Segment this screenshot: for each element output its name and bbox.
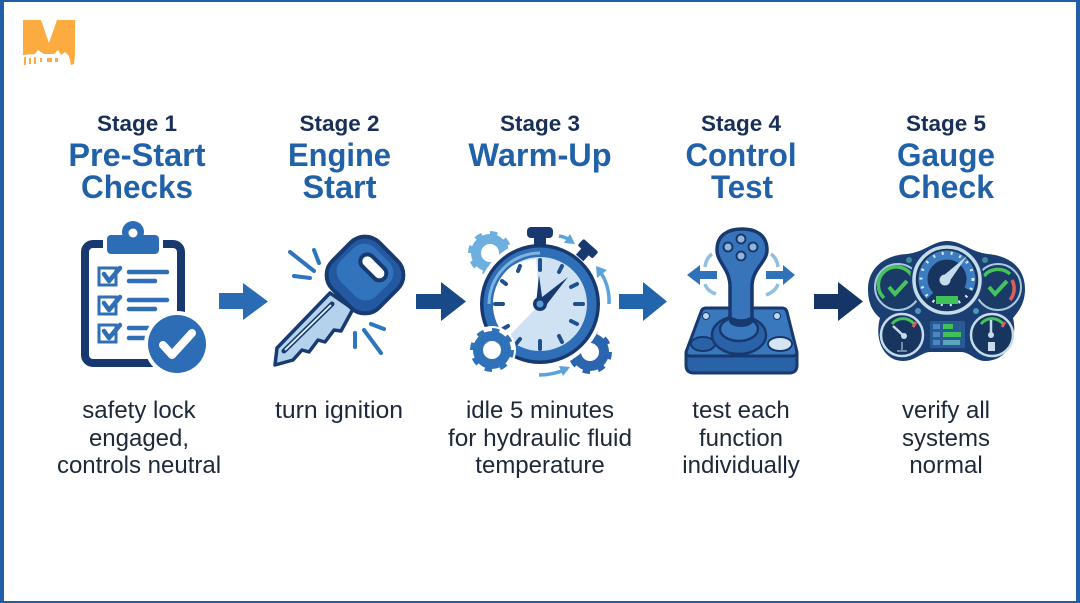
stage 1 description (57, 397, 221, 479)
stage 3 heading: Warm-Up (468, 137, 612, 173)
icon: stopwatch (468, 227, 609, 376)
stage 2 heading (288, 111, 391, 205)
gear: lower left (473, 331, 511, 369)
stage 1 heading: Checks (81, 169, 193, 205)
gauge: right (975, 264, 1021, 310)
gear: top left (471, 234, 509, 272)
icon: key (275, 228, 412, 365)
stage 4 heading (686, 111, 796, 205)
arrow 3 (619, 282, 667, 321)
arrow 1 (219, 283, 268, 320)
gauge: temperature (881, 314, 923, 356)
arrow 2 (416, 282, 466, 321)
stage 1 description: engaged, (89, 425, 189, 452)
icon: joystick (686, 229, 797, 373)
stage 3 heading: Stage 3 (500, 111, 580, 136)
stage 3 description: temperature (475, 452, 605, 479)
stage 4 description (682, 397, 800, 479)
stage 4 heading: Control (686, 137, 796, 173)
stage 4 heading: Stage 4 (701, 111, 781, 136)
arrow 4 (814, 282, 863, 321)
stage 1 description: controls neutral (57, 452, 221, 479)
stage 3 description: idle 5 minutes (466, 397, 614, 424)
stage 1 heading: Stage 1 (97, 111, 177, 136)
stage 2 description: turn ignition (275, 397, 403, 424)
gear: lower right (571, 333, 609, 371)
stage 4 heading: Test (711, 169, 773, 205)
stage 1 heading (68, 111, 206, 205)
stage 3 description (448, 397, 632, 479)
stage 5 description: normal (909, 452, 983, 479)
icon: clipboard (85, 221, 210, 377)
stage 4 description: function (699, 425, 783, 452)
gauge: speedometer (910, 243, 984, 317)
stage 3 heading (468, 111, 612, 173)
stage 4 description: test each (692, 397, 790, 424)
gauge: fuel (971, 314, 1013, 356)
stage 5 description: verify all (902, 397, 990, 424)
icon: dashboard (868, 241, 1025, 361)
stage 3 description: for hydraulic fluid (448, 425, 632, 452)
stage 2 heading: Engine (288, 137, 391, 173)
logo (23, 20, 75, 65)
stage 5 heading: Gauge (897, 137, 995, 173)
stage 5 description: systems (902, 425, 990, 452)
stage 5 description (902, 397, 990, 479)
stage 5 heading (897, 111, 995, 205)
stage 4 description: individually (682, 452, 800, 479)
stage 2 heading: Start (302, 169, 377, 205)
gauge: left (875, 264, 921, 310)
stage 5 heading: Check (898, 169, 995, 205)
stage 1 description: safety lock (82, 397, 197, 424)
status panel (930, 321, 965, 348)
stage 1 heading: Pre-Start (68, 137, 206, 173)
stage 2 heading: Stage 2 (299, 111, 380, 136)
stage 5 heading: Stage 5 (906, 111, 986, 136)
